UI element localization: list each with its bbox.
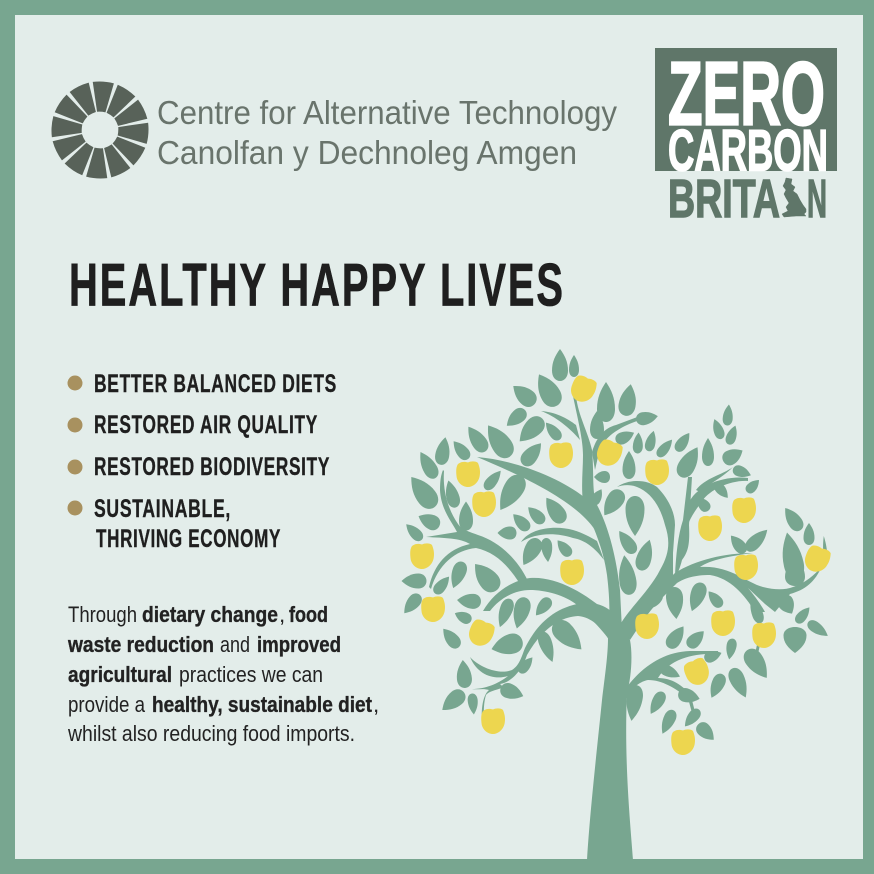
organisation name bbox=[157, 94, 617, 171]
bullet: restored air quality bbox=[68, 411, 318, 439]
body paragraph: practices we can bbox=[179, 662, 323, 687]
body paragraph: healthy, sustainable diet bbox=[152, 692, 372, 717]
leaves bbox=[399, 349, 831, 745]
body paragraph: whilst also reducing food imports. bbox=[67, 721, 355, 746]
body paragraph: improved bbox=[257, 632, 341, 657]
body paragraph: provide a bbox=[68, 692, 145, 717]
logo: Zero Carbon Britain bbox=[655, 44, 837, 229]
body paragraph: , bbox=[279, 602, 285, 627]
bullet: better balanced diets: BETTER BALANCED DIETS bbox=[94, 370, 337, 398]
body paragraph: agricultural bbox=[68, 662, 172, 687]
bullet: restored biodiversity: RESTORED BIODIVERSITY bbox=[94, 453, 330, 481]
body paragraph: dietary change bbox=[142, 602, 278, 627]
body paragraph: Through bbox=[68, 602, 137, 627]
illustration: apple tree bbox=[399, 349, 833, 860]
body paragraph: food bbox=[289, 602, 328, 627]
bullet: restored air quality: RESTORED AIR QUALITY bbox=[94, 411, 318, 439]
title: HEALTHY HAPPY LIVES bbox=[69, 252, 565, 318]
bullet: better balanced diets bbox=[68, 370, 337, 398]
body paragraph: waste reduction bbox=[67, 632, 214, 657]
bullet list bbox=[68, 370, 337, 553]
bullet: sustainable, thriving economy bbox=[68, 495, 281, 553]
organisation name: Centre for Alternative Technology bbox=[157, 94, 617, 131]
logo: Zero Carbon Britain: BRITA bbox=[668, 169, 780, 229]
bullet: sustainable, thriving economy: SUSTAINABLE, bbox=[94, 495, 231, 523]
logo: Centre for Alternative Technology bbox=[51, 81, 617, 179]
icon: map of Britain bbox=[782, 178, 806, 217]
bullet: sustainable, thriving economy: THRIVING ECONOMY bbox=[96, 525, 281, 553]
body paragraph: and bbox=[220, 632, 250, 657]
body paragraph: , bbox=[373, 692, 379, 717]
body paragraph bbox=[67, 602, 379, 746]
icon: sunburst wheel bbox=[51, 81, 149, 179]
tree trunk and branches bbox=[426, 396, 822, 860]
organisation name: Canolfan y Dechnoleg Amgen bbox=[157, 134, 577, 171]
logo: Zero Carbon Britain: N bbox=[807, 169, 827, 229]
apples bbox=[410, 373, 833, 755]
bullet: restored biodiversity bbox=[68, 453, 330, 481]
